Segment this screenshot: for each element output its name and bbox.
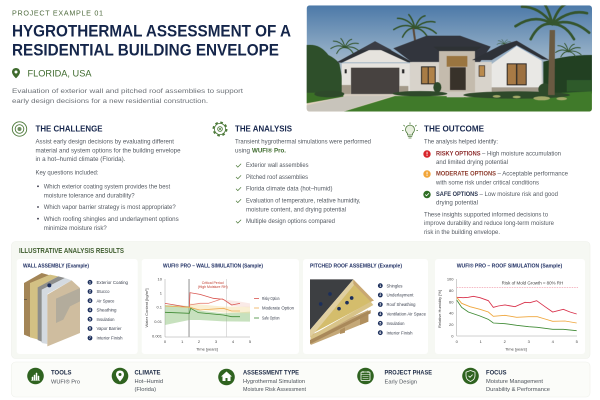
- roof chart axes: 2: [504, 339, 507, 344]
- panel: the outcome: [402, 122, 568, 236]
- summary: tools: WUFI® Pro: [51, 378, 80, 386]
- roof chart axes: 20: [449, 322, 454, 327]
- wall chart legend: Safe Option: [262, 316, 280, 321]
- icon: map pin: [12, 68, 20, 78]
- panel: the challenge: [12, 122, 181, 232]
- wall chart axes: 3: [215, 339, 218, 344]
- mold risk threshold: Risk of Mold Growth ≈ 80% RH: [502, 280, 563, 285]
- analysis checklist: Exterior wall assemblies: [246, 162, 308, 169]
- challenge text: Key questions included:: [36, 170, 99, 176]
- roof chart series: [457, 296, 577, 331]
- roof assembly title: PITCHED ROOF ASSEMBLY (Example): [310, 263, 402, 269]
- title: HYGROTHERMAL ASSESSMENT OF A: [12, 22, 291, 41]
- analysis intro: Transient hygrothermal simulations were performed: [235, 138, 371, 146]
- roof chart axes: 60: [449, 299, 454, 304]
- wall chart legend: Moderate Option: [262, 306, 294, 311]
- safe options: [423, 191, 558, 207]
- wall chart series: [165, 293, 250, 325]
- wall chart axes: 2: [198, 339, 201, 344]
- panel: illustrative analysis results: [12, 242, 590, 358]
- key questions list: [37, 184, 179, 232]
- summary: climate: [112, 368, 163, 393]
- wall chart axes: 4: [232, 339, 235, 344]
- roof assembly legend: 1: [379, 284, 381, 288]
- heading: the challenge: THE CHALLENGE: [36, 124, 103, 134]
- icon: light bulb: [402, 122, 418, 138]
- wall chart axes: [144, 277, 252, 351]
- outcome conclusion: These insights supported informed decisions to: [424, 212, 548, 218]
- roof assembly legend: Roof Sheathing: [386, 302, 416, 307]
- analysis checklist: moisture content, and drying potential: [246, 206, 346, 213]
- challenge text: material and system options for the building envelope: [36, 147, 181, 154]
- wall assembly legend: Exterior Coating: [96, 280, 128, 285]
- moderate options: with some risk under critical conditions: [435, 179, 539, 186]
- card: wall assembly: [17, 259, 138, 354]
- outcome conclusion: [424, 212, 554, 236]
- location: FLORIDA, USA: [28, 68, 92, 78]
- critical period band: (High Moisture RH): [198, 285, 228, 289]
- wall assembly legend: Interior Finish: [96, 336, 123, 341]
- wall assembly legend: Stucco: [96, 289, 110, 294]
- wall chart axes: 5: [249, 339, 252, 344]
- critical period band: [188, 279, 228, 337]
- wall assembly title: WALL ASSEMBLY (Example): [23, 263, 89, 269]
- heading: the outcome: THE OUTCOME: [424, 124, 484, 134]
- roof assembly legend: 4: [379, 312, 381, 316]
- risky options: – High moisture accumulation: [482, 151, 561, 158]
- roof chart title: WUFI® PRO – ROOF SIMULATION (Sample): [457, 262, 562, 269]
- wall chart axes: 1: [160, 291, 163, 296]
- roof assembly legend: Interior Finish: [386, 330, 413, 335]
- analysis checklist: Pitched roof assemblies: [246, 174, 308, 181]
- wall chart title: WUFI® PRO – WALL SIMULATION (Sample): [163, 262, 263, 269]
- wall chart axes: 0.001: [152, 333, 163, 338]
- icon: gear: [213, 122, 227, 136]
- outcome intro: The analysis helped identify:: [424, 138, 498, 146]
- wall chart axes: Time [years]: [196, 346, 218, 351]
- roof chart axes: 40: [449, 311, 454, 316]
- heading: the analysis: THE ANALYSIS: [235, 124, 292, 134]
- icon: shield: [462, 368, 479, 384]
- roof chart axes: [437, 277, 579, 352]
- safe options: drying potential: [436, 200, 478, 207]
- wall assembly legend: Insulation: [96, 317, 115, 322]
- roof chart axes: 1: [480, 339, 483, 344]
- icon: tools: [27, 368, 44, 384]
- wall chart legend: Risky Option: [262, 296, 280, 301]
- wall assembly legend: 7: [89, 336, 91, 340]
- card: roof simulation chart: [435, 259, 585, 354]
- analysis checklist: Florida climate data (hot–humid): [246, 186, 332, 193]
- roof assembly legend: Shingles: [386, 283, 403, 288]
- wall assembly legend: [88, 280, 128, 341]
- wall assembly legend: 5: [89, 317, 91, 321]
- moderate options: – Acceptable performance: [498, 171, 568, 178]
- icon: climate pin: [112, 368, 128, 384]
- icon: house: [218, 369, 235, 385]
- wall assembly legend: 2: [89, 290, 91, 294]
- roof chart axes: 0: [451, 333, 454, 338]
- wall chart axes: 0: [164, 339, 167, 344]
- summary: focus: Durability & Performance: [486, 387, 550, 393]
- roof assembly legend: 5: [379, 322, 381, 326]
- roof chart axes: 3: [528, 339, 531, 344]
- wall chart axes: 0.1: [156, 305, 163, 310]
- panel: the analysis: [213, 122, 371, 225]
- analysis checklist: [236, 162, 361, 225]
- risky options: and limited drying potential: [436, 159, 508, 166]
- summary: project phase: PROJECT PHASE: [384, 370, 432, 376]
- outcome conclusion: risk in the building envelope.: [424, 229, 500, 236]
- wall assembly legend: 1: [89, 280, 91, 284]
- analysis checklist: Evaluation of temperature, relative humidity,: [246, 198, 361, 204]
- analysis intro: [235, 138, 371, 154]
- roof chart axes: Time [years]: [505, 346, 527, 352]
- wall assembly legend: Vapor Barrier: [96, 326, 122, 331]
- title: RESIDENTIAL BUILDING ENVELOPE: [12, 41, 279, 60]
- critical period band: Critical Period: [202, 281, 224, 285]
- roof assembly legend: 3: [379, 303, 381, 307]
- roof assembly legend: Underlayment: [386, 293, 414, 298]
- summary: assessment type: ASSESSMENT TYPE: [243, 370, 299, 376]
- roof chart axes: 80: [449, 288, 454, 293]
- summary: focus: Moisture Management: [486, 379, 543, 385]
- roof illustration: [310, 279, 374, 345]
- summary: assessment type: Hygrothermal Simulation: [243, 379, 305, 385]
- summary strip: [12, 362, 590, 397]
- wall chart axes: 10: [158, 277, 163, 282]
- results heading: ILLUSTRATIVE ANALYSIS RESULTS: [19, 248, 124, 255]
- eyebrow: project example: PROJECT EXAMPLE 01: [12, 8, 103, 18]
- wall assembly legend: 3: [89, 299, 91, 303]
- wall chart axes: 1: [181, 339, 184, 344]
- analysis intro: using: [235, 147, 250, 154]
- roof assembly legend: 6: [379, 331, 381, 335]
- safe options: SAFE OPTIONS: [436, 191, 478, 198]
- moderate options: MODERATE OPTIONS: [436, 171, 496, 178]
- risky options: [423, 150, 561, 166]
- wall assembly legend: Sheathing: [96, 308, 117, 313]
- icon: calendar: [357, 368, 374, 384]
- safe options: – Low moisture risk and good: [480, 191, 558, 198]
- photo: Florida residence at dusk: [307, 0, 592, 112]
- summary: tools: [27, 368, 80, 386]
- key questions list: Which exterior coating system provides the best: [44, 184, 170, 190]
- wall assembly legend: 4: [89, 308, 91, 312]
- key questions list: Which roofing shingles and underlayment options: [44, 216, 179, 223]
- roof assembly legend: Insulation: [386, 321, 405, 326]
- card: pitched roof assembly: [303, 259, 428, 354]
- wall chart legend: [254, 296, 294, 321]
- roof assembly legend: 2: [379, 293, 381, 297]
- summary: climate: CLIMATE: [134, 370, 160, 376]
- summary: assessment type: Moisture Risk Assessment: [243, 387, 306, 393]
- analysis checklist: Multiple design options compared: [246, 218, 335, 225]
- roof chart axes: 4: [552, 339, 555, 344]
- card: wall simulation chart: [142, 259, 299, 354]
- challenge text: in a hot–humid climate (Florida).: [36, 156, 126, 163]
- summary: project phase: Early Design: [384, 380, 417, 386]
- roof chart axes: Relative Humidity [%]: [437, 290, 442, 328]
- challenge text: [36, 138, 181, 176]
- icon: target: [12, 122, 27, 136]
- mold risk threshold: [457, 280, 578, 288]
- wall chart axes: Water Content [kg/m³]: [144, 289, 149, 327]
- title: [12, 22, 291, 60]
- description: early design decisions for a new residential construction.: [12, 98, 208, 105]
- key questions list: Which vapor barrier strategy is most appropriate?: [44, 204, 176, 211]
- risky options: RISKY OPTIONS: [436, 151, 480, 158]
- analysis intro: WUFI® Pro.: [252, 146, 286, 154]
- roof chart axes: 0: [456, 339, 459, 344]
- summary: climate: Hot–Humid: [134, 379, 163, 385]
- wall chart axes: 0.01: [154, 319, 163, 324]
- summary: tools: TOOLS: [51, 370, 72, 376]
- wall assembly legend: Air Space: [96, 298, 115, 303]
- moderate options: [423, 170, 568, 186]
- key questions list: minimize moisture risk?: [44, 225, 107, 232]
- summary: project phase: [357, 368, 432, 386]
- wall assembly legend: 6: [89, 327, 91, 331]
- roof chart axes: 100: [447, 277, 454, 282]
- roof assembly legend: Ventilation Air Space: [386, 312, 426, 317]
- description: Evaluation of exterior wall and pitched roof assemblies to support: [12, 88, 243, 95]
- summary: climate: (Florida): [134, 387, 156, 393]
- wall layers illustration: [24, 273, 80, 346]
- outcome conclusion: improve durability and reduce long-term moisture: [424, 220, 554, 227]
- summary: focus: FOCUS: [486, 370, 506, 376]
- roof assembly legend: [378, 283, 426, 335]
- key questions list: moisture tolerance and durability?: [44, 192, 135, 199]
- challenge text: Assist early design decisions by evaluating different: [36, 138, 174, 146]
- roof chart axes: 5: [576, 339, 579, 344]
- description: [12, 88, 243, 105]
- summary: assessment type: [218, 369, 306, 393]
- summary: focus: [462, 368, 550, 393]
